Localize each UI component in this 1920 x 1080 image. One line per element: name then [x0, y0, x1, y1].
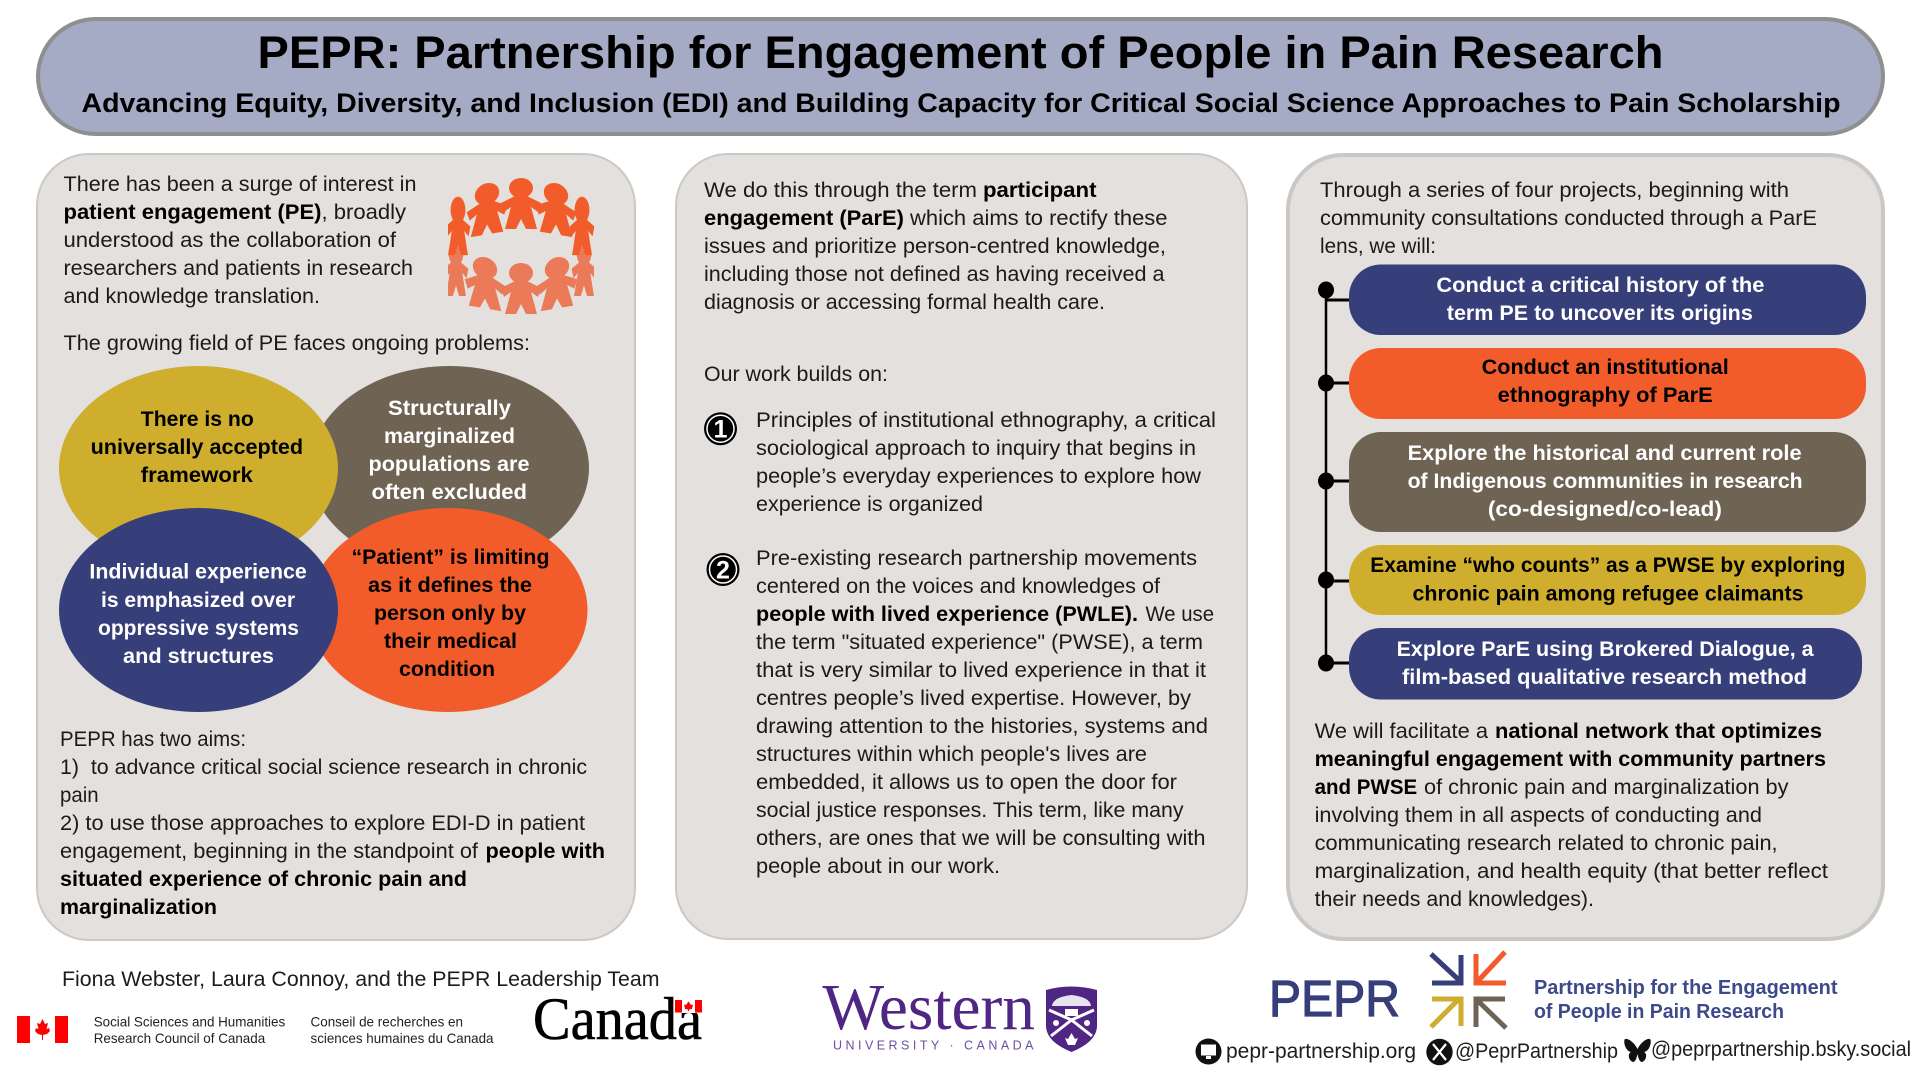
authors: Fiona Webster, Laura Connoy, and the PEPR Leadership Team: [62, 968, 660, 991]
panel: left, patient engagement problems: [37, 154, 635, 940]
icon: number 2: 2: [716, 556, 730, 584]
logo: SSHRC: Social Sciences and Humanities: [94, 1014, 285, 1030]
logo: SSHRC: Conseil de recherches en: [310, 1014, 463, 1030]
panel: right, four projects: [1288, 155, 1883, 939]
pill: Indigenous communities: of Indigenous communities in research: [1408, 470, 1803, 493]
item 2 text: centered on the voices and knowledges of: [756, 575, 1160, 598]
social links: [1196, 1038, 1911, 1065]
intro text: community consultations conducted through a ParE: [1320, 207, 1817, 230]
intro text: Through a series of four projects, beginning with: [1320, 179, 1789, 202]
bubble: individual experience: oppressive systems: [98, 617, 299, 640]
item 2 text: that is very similar to lived experience in that it: [756, 659, 1206, 682]
aims text: people with: [486, 840, 605, 863]
bubble: patient is limiting: as it defines the: [368, 574, 532, 597]
aims text: PEPR has two aims:: [60, 728, 246, 751]
pill: critical history: [1349, 264, 1866, 335]
item 1 text: experience is organized: [756, 493, 983, 516]
item 2 text: social justice responses. This term, like many: [756, 799, 1184, 822]
pill: critical history: Conduct a critical history of the: [1436, 274, 1764, 297]
closing paragraph: and PWSE: [1315, 776, 1417, 799]
logo: PEPR: PEPR: [1269, 970, 1400, 1027]
bubble: individual experience: is emphasized over: [101, 589, 295, 612]
subtitle: Advancing Equity, Diversity, and Inclusion (EDI) and Building Capacity for Critical Social Science Approaches to Pain Scholarship: [82, 88, 1840, 118]
intro text: [64, 173, 416, 308]
timeline connector: [1318, 282, 1350, 672]
bubble: individual experience: [59, 508, 338, 712]
icon: number 1: [704, 412, 737, 445]
icon: Bluesky butterfly: [1624, 1039, 1651, 1062]
intro text: There has been a surge of interest in: [64, 173, 416, 196]
intro text: lens, we will:: [1320, 235, 1436, 258]
bubble: patient is limiting: condition: [399, 658, 495, 681]
bubble: patient is limiting: person only by: [374, 602, 526, 625]
icon: website: [1196, 1038, 1222, 1064]
item 2 text: [756, 547, 1214, 878]
pill: institutional ethnography: Conduct an institutional: [1482, 356, 1729, 379]
social links: @PeprPartnership: [1455, 1040, 1618, 1063]
intro text: understood as the collaboration of: [64, 229, 396, 252]
logo: PEPR: Partnership for the Engagement: [1534, 977, 1838, 999]
icon: X: [1426, 1039, 1453, 1065]
bubble: no framework: universally accepted: [91, 436, 303, 459]
pill: brokered dialogue: [1349, 628, 1862, 700]
bubble: no framework: There is no: [141, 408, 254, 431]
bubble: excluded populations: often excluded: [372, 481, 527, 504]
pill: Indigenous communities: (co-designed/co-lead): [1488, 498, 1722, 521]
social links: pepr-partnership.org: [1226, 1040, 1416, 1063]
pill: institutional ethnography: [1349, 348, 1866, 419]
intro text: We do this through the term: [704, 179, 977, 202]
problems lead-in: The growing field of PE faces ongoing problems:: [64, 332, 530, 355]
problem bubbles: [59, 366, 589, 712]
intro text: including those not defined as having received a: [704, 263, 1165, 286]
closing paragraph: involving them in all aspects of conducting and: [1315, 804, 1762, 827]
aims text: pain: [60, 784, 99, 807]
intro text: diagnosis or accessing formal health care.: [704, 291, 1105, 314]
aims text: 1) to advance critical social science research in chronic: [60, 756, 587, 779]
logo: Canada wordmark: Canada: [533, 986, 702, 1052]
closing paragraph: their needs and knowledges).: [1315, 888, 1594, 911]
aims text: [60, 728, 605, 919]
intro text: participant: [983, 179, 1096, 202]
closing paragraph: of chronic pain and marginalization by: [1424, 776, 1789, 799]
logo: Western University: Western: [822, 971, 1035, 1044]
aims text: marginalization: [60, 896, 217, 919]
closing paragraph: We will facilitate a: [1315, 720, 1488, 743]
item 2 text: centres people’s lived expertise. However, by: [756, 687, 1192, 710]
logo: SSHRC: sciences humaines du Canada: [310, 1030, 494, 1046]
logo: Western University: UNIVERSITY · CANADA: [833, 1038, 1034, 1052]
closing paragraph: marginalization, and health equity (that better reflect: [1315, 860, 1828, 883]
bubble: patient is limiting: “Patient” is limiting: [352, 546, 550, 569]
bubble: patient is limiting: [308, 508, 588, 712]
pill: who counts: Examine “who counts” as a PWSE by exploring: [1370, 554, 1845, 577]
item 2 text: people with lived experience (PWLE).: [756, 603, 1138, 626]
bubble: excluded populations: populations are: [368, 453, 530, 476]
item 2 text: structures within which people's lives are: [756, 743, 1147, 766]
pill: who counts: [1349, 545, 1866, 615]
logo: PEPR: [1269, 952, 1838, 1028]
pill: brokered dialogue: film-based qualitative research method: [1402, 666, 1807, 689]
item 1 text: Principles of institutional ethnography, a critical: [756, 409, 1216, 432]
pill: who counts: chronic pain among refugee claimants: [1412, 582, 1804, 606]
logo: PEPR: of People in Pain Research: [1534, 1001, 1784, 1023]
item 2 text: drawing attention to the histories, systems and: [756, 715, 1208, 738]
icon: number 2: [706, 553, 740, 586]
bubble: no framework: [59, 366, 338, 570]
item 2 text: embedded, it allows us to open the door for: [756, 771, 1177, 794]
title: PEPR: Partnership for Engagement of People in Pain Research: [258, 27, 1664, 78]
intro text: issues and prioritize person-centred knowledge,: [704, 235, 1166, 258]
pill: brokered dialogue: Explore ParE using Brokered Dialogue, a: [1397, 638, 1814, 661]
item 1 text: sociological approach to inquiry that begins in: [756, 437, 1196, 460]
bubble: excluded populations: Structurally: [388, 397, 511, 420]
intro text: [704, 179, 1168, 314]
closing paragraph: communicating research related to chronic pain,: [1315, 832, 1778, 855]
icon: four converging arrows: [1431, 952, 1506, 1028]
intro text: [1320, 179, 1817, 258]
item 2 text: people about in our work.: [756, 855, 1000, 878]
intro text: patient engagement (PE): [64, 201, 322, 224]
closing paragraph: national network that optimizes: [1495, 720, 1822, 743]
icon: Canadian flag: [17, 1016, 68, 1043]
bubble: individual experience: Individual experience: [89, 560, 307, 584]
intro text: and knowledge translation.: [64, 285, 320, 308]
icon: number 1: 1: [714, 416, 728, 444]
item 2 text: Pre-existing research partnership movements: [756, 547, 1197, 570]
pill: critical history: term PE to uncover its origins: [1447, 302, 1753, 325]
intro text: engagement (ParE): [704, 207, 904, 230]
logo: SSHRC: Research Council of Canada: [94, 1030, 265, 1046]
pill: Indigenous communities: Explore the historical and current role: [1408, 442, 1802, 465]
pill: Indigenous communities: [1349, 432, 1866, 532]
aims text: 2) to use those approaches to explore EDI-D in patient: [60, 812, 585, 835]
header banner: [38, 19, 1883, 134]
bubble: no framework: framework: [141, 464, 253, 487]
closing paragraph: meaningful engagement with community partners: [1315, 748, 1826, 771]
aims text: situated experience of chronic pain and: [60, 868, 467, 891]
item 2 text: We use: [1146, 603, 1214, 626]
bubble: excluded populations: [310, 366, 589, 570]
logo: SSHRC: [17, 1014, 494, 1046]
intro text: , broadly: [322, 201, 407, 224]
bubble: excluded populations: marginalized: [384, 425, 515, 448]
intro text: researchers and patients in research: [64, 257, 413, 280]
bubble: individual experience: and structures: [123, 645, 274, 668]
item 1 text: [756, 409, 1216, 516]
icon: ring of paper-chain people: [444, 178, 596, 314]
item 2 text: the term "situated experience" (PWSE), a term: [756, 631, 1203, 654]
lead-in: Our work builds on:: [704, 363, 888, 386]
social links: @peprpartnership.bsky.social: [1651, 1038, 1911, 1061]
icon: Western crest: [1046, 986, 1097, 1052]
intro text: which aims to rectify these: [909, 207, 1168, 230]
item 2 text: others, are ones that we will be consulting with: [756, 827, 1206, 850]
bubble: patient is limiting: their medical: [384, 630, 517, 653]
panel: middle, participant engagement: [676, 154, 1247, 939]
pill: institutional ethnography: ethnography of ParE: [1498, 384, 1713, 407]
item 1 text: people’s everyday experiences to explore how: [756, 465, 1202, 488]
closing paragraph: [1315, 720, 1828, 911]
aims text: engagement, beginning in the standpoint of: [60, 840, 478, 863]
